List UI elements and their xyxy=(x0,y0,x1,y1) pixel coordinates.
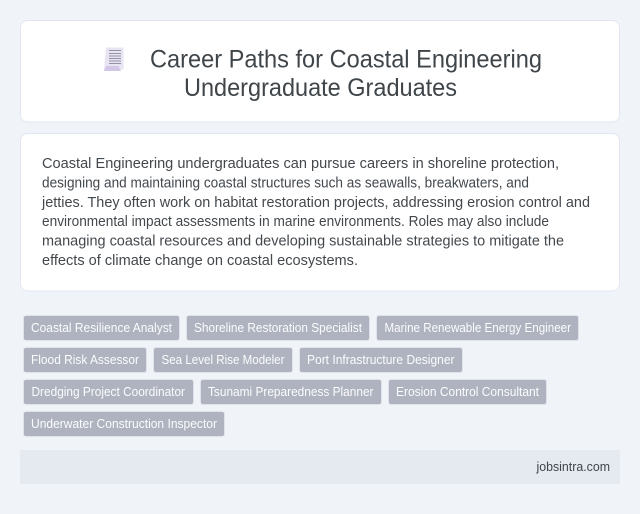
tag: Dredging Project Coordinator xyxy=(24,380,194,404)
heading: Undergraduate Graduates xyxy=(184,74,457,102)
tag: Shoreline Restoration Specialist xyxy=(186,316,370,340)
tag: Erosion Control Consultant xyxy=(388,380,546,404)
tag: Port Infrastructure Designer: Port Infrastructure Designer xyxy=(307,353,454,367)
tag: Coastal Resilience Analyst: Coastal Resilience Analyst xyxy=(31,321,172,335)
tag: Dredging Project Coordinator: Dredging Project Coordinator xyxy=(32,385,185,399)
description text: managing coastal resources and developing sustainable strategies to mitigate the xyxy=(42,234,564,250)
icon: paper scroll document xyxy=(104,48,124,71)
footer source text: jobsintra.com xyxy=(536,459,610,474)
description text: designing and maintaining coastal structures such as seawalls, breakwaters, and xyxy=(42,176,529,192)
tag: Tsunami Preparedness Planner: Tsunami Preparedness Planner xyxy=(208,385,374,399)
heading xyxy=(150,46,542,102)
tag: Erosion Control Consultant: Erosion Control Consultant xyxy=(396,385,539,399)
tag: Underwater Construction Inspector xyxy=(24,412,224,436)
description text: environmental impact assessments in marine environments. Roles may also include xyxy=(42,214,549,230)
tag list xyxy=(24,316,578,436)
panel: title card xyxy=(20,20,620,122)
tag: Sea Level Rise Modeler: Sea Level Rise Modeler xyxy=(162,353,284,367)
description text xyxy=(41,156,590,269)
description text: Coastal Engineering undergraduates can pursue careers in shoreline protection, xyxy=(42,156,559,172)
tag: Flood Risk Assessor: Flood Risk Assessor xyxy=(31,353,139,367)
description text: jetties. They often work on habitat restoration projects, addressing erosion control and xyxy=(41,195,590,211)
heading: Career Paths for Coastal Engineering xyxy=(150,46,542,74)
tag: Flood Risk Assessor xyxy=(24,348,146,372)
tag: Shoreline Restoration Specialist: Shoreline Restoration Specialist xyxy=(194,321,362,335)
tag: Port Infrastructure Designer xyxy=(300,348,462,372)
tag: Marine Renewable Energy Engineer: Marine Renewable Energy Engineer xyxy=(384,321,571,335)
panel: description card xyxy=(20,134,620,291)
description text: effects of climate change on coastal ecosystems. xyxy=(42,253,358,269)
tag: Sea Level Rise Modeler xyxy=(154,348,292,372)
tag: Coastal Resilience Analyst xyxy=(24,316,180,340)
footer bar xyxy=(20,450,620,484)
tag: Underwater Construction Inspector: Underwater Construction Inspector xyxy=(31,417,217,431)
tag: Marine Renewable Energy Engineer xyxy=(376,316,578,340)
tag: Tsunami Preparedness Planner xyxy=(200,380,382,404)
